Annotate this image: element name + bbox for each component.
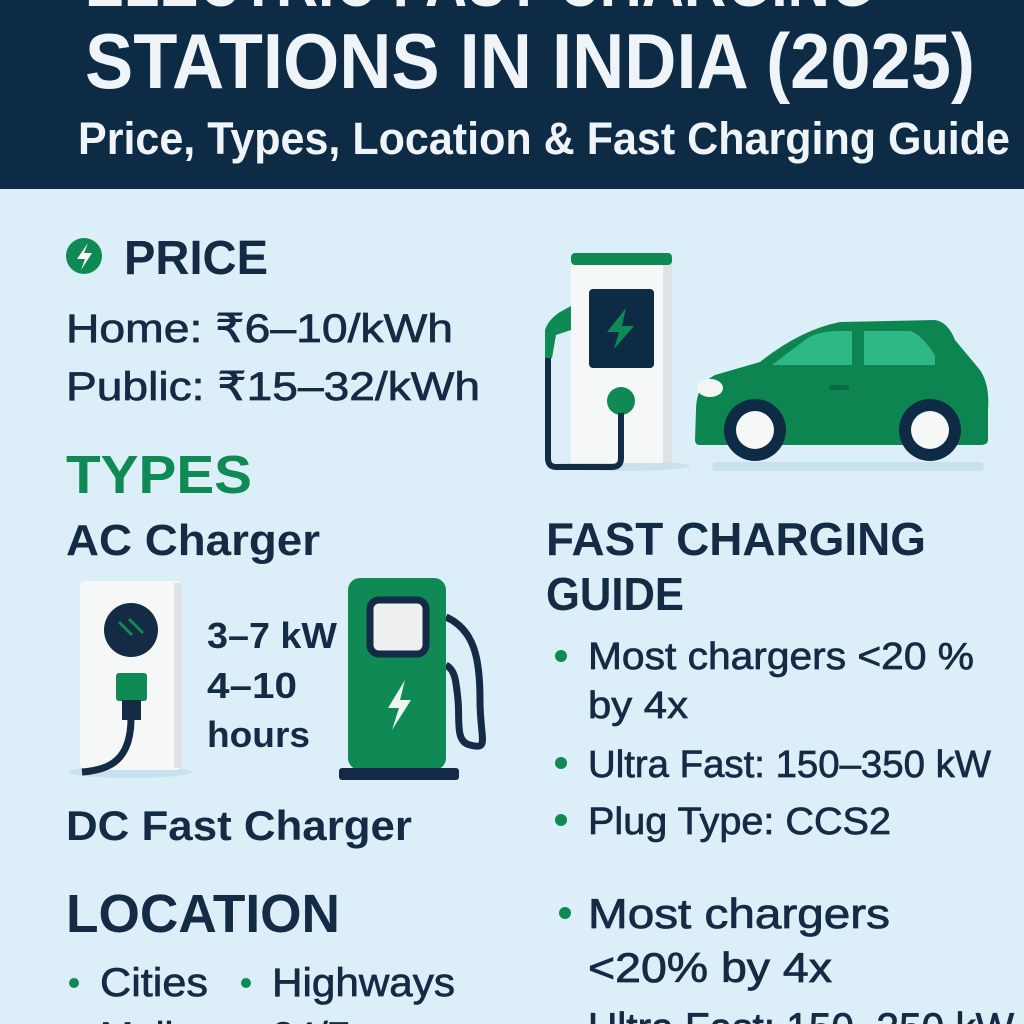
- list: repeated facts: <20% by 4x: [588, 944, 832, 991]
- heading: types: TYPES: [66, 445, 252, 505]
- list: repeated facts: Most chargers: [588, 890, 890, 937]
- list: fast charging facts: by 4x: [588, 685, 688, 727]
- title: STATIONS IN INDIA (2025): [85, 17, 975, 105]
- illustration: charging station and car: [545, 253, 988, 471]
- heading: location: LOCATION: [66, 884, 340, 944]
- list: fast charging facts: Most chargers <20 %: [588, 636, 974, 678]
- subheading: DC fast charger: DC Fast Charger: [66, 802, 412, 849]
- car: [695, 320, 988, 445]
- subheading: AC charger: AC Charger: [66, 516, 320, 565]
- heading: fast charging guide: [546, 513, 926, 620]
- icon: AC wall charger: [68, 581, 192, 778]
- text: price values: [66, 307, 480, 409]
- list: fast charging facts: Ultra Fast: 150–350 kW: [588, 744, 991, 786]
- text: AC specs: [207, 615, 337, 755]
- heading: fast charging guide: GUIDE: [546, 568, 684, 620]
- list: locations: Highways: [272, 961, 455, 1005]
- text: AC specs: 3–7 kW: [207, 615, 337, 656]
- subtitle: Price, Types, Location & Fast Charging Guide: [78, 113, 1010, 164]
- list: fast charging facts: [555, 636, 991, 843]
- text: AC specs: hours: [207, 714, 310, 755]
- icon: DC fast charger pump: [339, 578, 482, 780]
- text: price values: Public: ₹15–32/kWh: [66, 365, 480, 409]
- header banner: [0, 0, 1024, 189]
- heading: fast charging guide: FAST CHARGING: [546, 513, 926, 565]
- list: fast charging facts: Plug Type: CCS2: [588, 801, 891, 843]
- icon: price bolt: [66, 238, 102, 274]
- heading: price: PRICE: [124, 232, 268, 285]
- list: locations: [69, 961, 455, 1024]
- text: AC specs: 4–10: [207, 665, 297, 706]
- text: price values: Home: ₹6–10/kWh: [66, 307, 453, 351]
- list: repeated facts: [559, 890, 1014, 1024]
- list: locations: Cities: [100, 961, 208, 1005]
